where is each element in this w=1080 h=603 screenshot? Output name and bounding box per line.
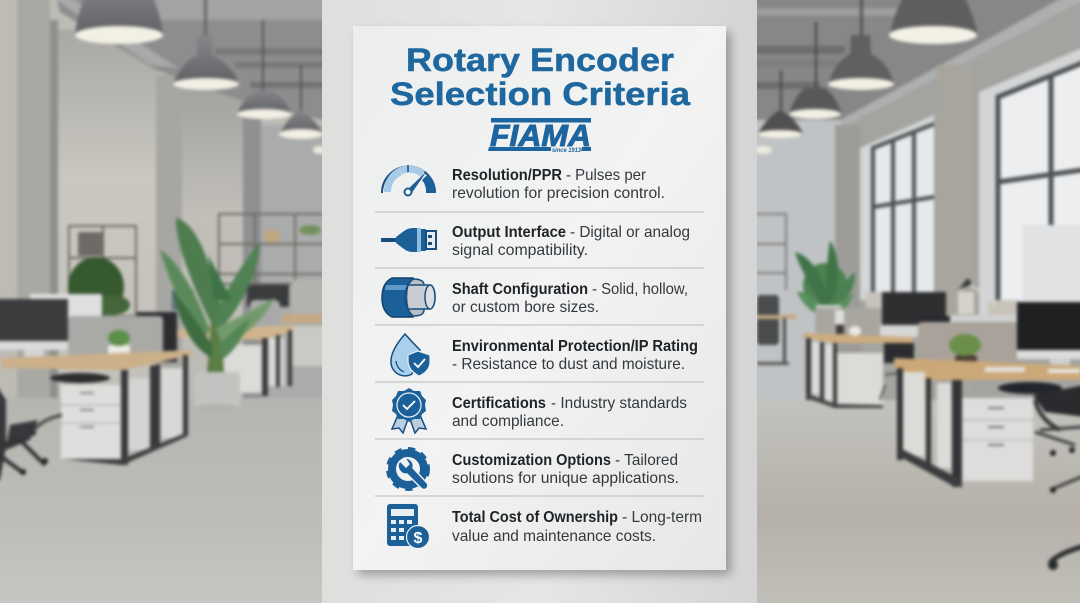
icon: calculator with dollar: $ <box>414 530 423 547</box>
text: certifications: Certifications <box>452 395 546 412</box>
item: shaft configuration <box>382 278 688 317</box>
logo: FIAMA since 1913: FIAMA <box>490 118 591 153</box>
desk 3 <box>894 358 1080 380</box>
desk 2 <box>177 325 292 340</box>
title: Rotary Encoder <box>406 42 674 78</box>
text: shaft configuration: or custom bore sizes. <box>452 299 599 316</box>
text: customization options: - Tailored <box>615 452 678 469</box>
big plant <box>195 372 240 410</box>
lamps <box>860 0 863 50</box>
icon: badge <box>392 388 426 433</box>
item: certifications <box>392 388 687 433</box>
text: environmental protection: Environmental Protection/IP Rating <box>452 338 698 355</box>
pot plant <box>955 355 977 368</box>
monitor <box>0 299 68 341</box>
text: resolution: - Pulses per <box>566 167 647 184</box>
logo: FIAMA since 1913: since 1913 <box>552 147 581 154</box>
text: shaft configuration: Shaft Configuration <box>452 281 588 298</box>
text: customization options: solutions for unique applications. <box>452 470 679 487</box>
text: output interface <box>452 224 690 259</box>
icon: gear and wrench <box>388 450 428 489</box>
lamp small <box>960 282 995 305</box>
icon: water drop and shield <box>391 334 430 376</box>
text: certifications: - Industry standards <box>551 395 687 412</box>
divider <box>68 316 163 356</box>
text: total cost of ownership: Total Cost of Ownership <box>452 509 618 526</box>
text: shaft configuration: - Solid, hollow, <box>592 281 688 298</box>
text: customization options <box>452 452 679 487</box>
text: certifications: and compliance. <box>452 413 564 430</box>
text: total cost of ownership: value and maintenance costs. <box>452 528 656 545</box>
lamps <box>204 0 207 50</box>
item: resolution <box>382 165 665 202</box>
text: resolution <box>452 167 665 202</box>
pot plant <box>108 345 130 358</box>
windows <box>860 115 934 300</box>
monitor <box>1017 302 1080 350</box>
panel: selection criteria card <box>353 26 726 570</box>
text: environmental protection: - Resistance to dust and moisture. <box>452 356 685 373</box>
text: output interface: signal compatibility. <box>452 242 588 259</box>
back monitor and dividers <box>866 292 882 317</box>
desk 2 <box>803 333 913 343</box>
title: Selection Criteria <box>390 76 690 112</box>
far desk <box>757 295 779 345</box>
text: environmental protection <box>452 338 698 373</box>
text: output interface: - Digital or analog <box>570 224 690 241</box>
icon: calculator with dollar <box>387 504 430 548</box>
shelf <box>750 214 786 290</box>
item: output interface <box>381 224 690 259</box>
chair <box>1033 380 1080 420</box>
text: resolution: Resolution/PPR <box>452 167 562 184</box>
desk 1 <box>2 350 192 370</box>
item: environmental protection <box>391 334 698 376</box>
left office background <box>0 0 330 603</box>
icon: gauge <box>382 165 436 196</box>
back monitor <box>30 294 102 340</box>
text: resolution: revolution for precision control. <box>452 185 665 202</box>
text: customization options: Customization Options <box>452 452 611 469</box>
shelves <box>69 214 330 316</box>
text: output interface: Output Interface <box>452 224 566 241</box>
icon: plug <box>381 228 436 252</box>
panel shadow <box>358 32 731 575</box>
icon: shaft <box>382 278 435 317</box>
divider <box>918 322 1020 366</box>
back desks <box>247 285 289 307</box>
right office background <box>750 0 1080 603</box>
title <box>390 42 690 112</box>
plant <box>795 240 855 316</box>
chair <box>0 360 38 480</box>
dividers <box>375 212 704 496</box>
text: total cost of ownership: - Long-term <box>622 509 702 526</box>
item: total cost of ownership <box>387 504 702 548</box>
text: shaft configuration <box>452 281 688 316</box>
text: certifications <box>452 395 687 430</box>
item: customization options <box>388 450 679 489</box>
text: total cost of ownership <box>452 509 702 545</box>
center wall <box>322 0 757 603</box>
